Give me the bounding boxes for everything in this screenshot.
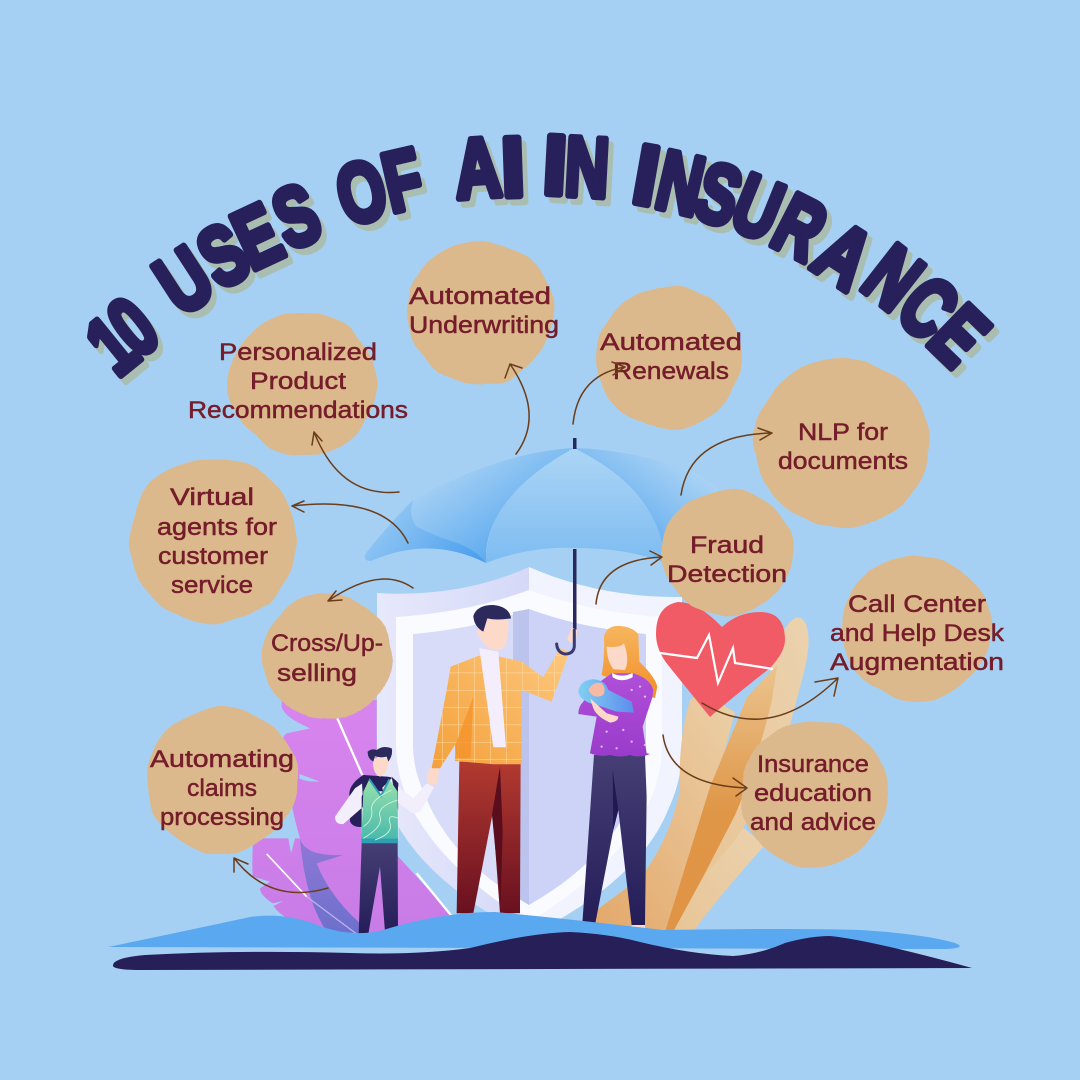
title: 10 Uses of AI in Insurance: O bbox=[327, 141, 396, 244]
title: 10 Uses of AI in Insurance: N bbox=[563, 119, 611, 215]
title: 10 Uses of AI in Insurance: 0 bbox=[91, 280, 175, 374]
bubble: Automated Underwriting: Underwriting bbox=[409, 312, 559, 339]
arrow: to call center bbox=[702, 678, 838, 719]
title: 10 Uses of AI in Insurance: N bbox=[847, 227, 939, 328]
illustration: woman and baby bbox=[578, 626, 657, 931]
title: 10 Uses of AI in Insurance: A bbox=[799, 203, 889, 307]
arrow: to underwriting bbox=[505, 364, 529, 454]
bubble: NLP for documents bbox=[755, 358, 929, 528]
title: 10 Uses of AI in Insurance: I bbox=[627, 127, 666, 223]
arrow: to fraud bbox=[596, 551, 662, 604]
bubble: Automating claims processing bbox=[147, 707, 297, 853]
illustration: orange leaves bbox=[573, 617, 809, 932]
title: 10 Uses of AI in Insurance: U bbox=[139, 228, 229, 332]
bubble: Insurance education and advice: and advice bbox=[750, 809, 876, 836]
title: 10 Uses of AI in Insurance: A bbox=[452, 119, 504, 217]
bubble: Automated Renewals: Automated bbox=[600, 329, 742, 356]
arrow: to NLP bbox=[681, 428, 772, 495]
bubble: Personalized Product Recommendations: Recommendations bbox=[188, 397, 408, 424]
bubble: Personalized Product Recommendations bbox=[188, 312, 408, 456]
canopy left fold bbox=[411, 448, 574, 563]
bubble: NLP for documents: documents bbox=[778, 448, 908, 475]
bubble: Virtual agents for customer service: agents for bbox=[157, 514, 277, 541]
illustration: man bbox=[427, 605, 577, 913]
illustration: boy bbox=[335, 747, 439, 934]
ground: blue wave bbox=[108, 912, 960, 949]
bubble: Call Center and Help Desk Augmentation: and Help Desk bbox=[830, 620, 1005, 647]
bubble: Personalized Product Recommendations: Product bbox=[250, 368, 346, 395]
bubble: Call Center and Help Desk Augmentation bbox=[830, 556, 1005, 700]
bubble: Virtual agents for customer service bbox=[129, 458, 297, 622]
bubble: Personalized Product Recommendations: Personalized bbox=[219, 339, 377, 366]
arrow: to cross-selling bbox=[328, 579, 413, 601]
icon: heart with pulse bbox=[656, 602, 785, 717]
bubble: Insurance education and advice: Insurance bbox=[757, 751, 869, 778]
title: 10 Uses of AI in Insurance: S bbox=[183, 205, 264, 306]
title: 10 Uses of AI in Insurance: N bbox=[649, 133, 712, 234]
bubble: NLP for documents: NLP for bbox=[798, 419, 888, 446]
bubble: Automating claims processing: processing bbox=[160, 804, 284, 831]
bubble: Cross/Up-selling: Cross/Up- bbox=[271, 630, 383, 657]
canopy left wing bbox=[365, 500, 486, 563]
title: 10 Uses of AI in Insurance: F bbox=[374, 130, 431, 230]
bubble: Cross/Up-selling bbox=[262, 593, 392, 719]
bubble: Fraud Detection: Detection bbox=[667, 561, 787, 588]
arrow: to claims processing bbox=[234, 858, 328, 893]
bubble: Call Center and Help Desk Augmentation: Augmentation bbox=[830, 649, 1004, 676]
bubble: Virtual agents for customer service: Virtual bbox=[170, 484, 254, 511]
far right leaf bbox=[703, 617, 809, 877]
bubble: Fraud Detection: Fraud bbox=[690, 532, 764, 559]
bubble: Virtual agents for customer service: service bbox=[171, 572, 253, 599]
bubble: Automated Renewals bbox=[596, 286, 742, 430]
bubble: Cross/Up-selling: selling bbox=[277, 660, 357, 687]
left leaf bbox=[573, 697, 735, 932]
bubble: Fraud Detection bbox=[662, 489, 792, 615]
title: 10 Uses of AI in Insurance: 1 bbox=[70, 299, 154, 393]
bubble: Virtual agents for customer service: customer bbox=[158, 543, 268, 570]
arrow: to personalized bbox=[312, 432, 399, 492]
bubble: Automating claims processing: Automating bbox=[150, 746, 294, 773]
arrow: to virtual agents bbox=[292, 501, 408, 543]
title: 10 Uses of AI in Insurance: S bbox=[685, 143, 752, 245]
bubble: Automated Underwriting bbox=[407, 240, 559, 384]
title: 10 Uses of AI in Insurance: I bbox=[500, 120, 526, 214]
bubble: Automated Renewals: Renewals bbox=[613, 358, 729, 385]
canopy right side bbox=[574, 448, 786, 562]
title: 10 Uses of AI in Insurance: E bbox=[912, 288, 1006, 384]
title: 10 Uses of AI in Insurance bbox=[70, 117, 1006, 393]
illustration: purple leaves bbox=[252, 700, 457, 935]
title: 10 Uses of AI in Insurance: U bbox=[720, 156, 796, 259]
title: 10 Uses of AI in Insurance: R bbox=[759, 176, 841, 279]
arrow: to renewals bbox=[573, 362, 625, 424]
canopy centre panel bbox=[486, 448, 664, 563]
illustration: umbrella bbox=[365, 438, 786, 631]
title: 10 Uses of AI in Insurance: S bbox=[261, 165, 332, 268]
ground: dark wave bbox=[113, 932, 972, 970]
arrow: to insurance education bbox=[663, 735, 747, 796]
lower right leaf bbox=[670, 823, 765, 932]
illustration: shield bbox=[377, 567, 682, 936]
title: 10 Uses of AI in Insurance: C bbox=[881, 258, 975, 358]
bubble: Insurance education and advice: education bbox=[754, 780, 872, 807]
bubble: Call Center and Help Desk Augmentation: Call Center bbox=[848, 591, 986, 618]
handle bbox=[573, 438, 576, 449]
bubble: Automated Underwriting: Automated bbox=[409, 283, 551, 310]
bubble: Insurance education and advice bbox=[740, 722, 888, 868]
title: 10 Uses of AI in Insurance: E bbox=[219, 185, 295, 288]
title: 10 Uses of AI in Insurance: I bbox=[541, 117, 569, 213]
bubble: Automating claims processing: claims bbox=[187, 775, 257, 802]
middle orange leaf bbox=[665, 665, 777, 932]
